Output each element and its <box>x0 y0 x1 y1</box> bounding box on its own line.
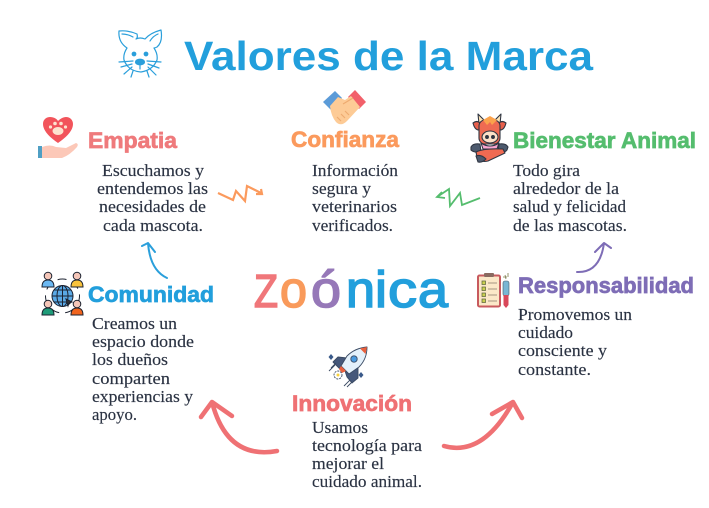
text: Responsabilidad description: constante. <box>518 360 591 379</box>
icon: handshake <box>323 90 366 124</box>
panel: innovacion <box>292 347 422 491</box>
icon: rocket <box>328 347 367 387</box>
text: Innovación description: Usamos <box>312 418 368 437</box>
text: Bienestar Animal description: Todo gira <box>513 161 580 180</box>
text: Comunidad description <box>92 314 194 424</box>
logo: Zoónica: ó <box>311 261 341 318</box>
text: Comunidad description: experiencias y <box>92 387 194 406</box>
text: Comunidad description: Creamos un <box>92 314 178 333</box>
heading: Comunidad: Comunidad <box>88 282 214 307</box>
text: Comunidad description: espacio donde <box>92 332 194 351</box>
icon: clipboard and pen <box>478 273 509 308</box>
logo: Zoónica <box>254 261 449 318</box>
icon: community globe <box>42 272 83 315</box>
arrow: red curved right <box>444 402 522 448</box>
heading: Empatia: Empatia <box>88 128 178 153</box>
heading: Responsabilidad: Responsabilidad <box>518 273 694 298</box>
panel: confianza <box>291 90 400 235</box>
text: Bienestar Animal description: de las mascotas. <box>513 216 627 235</box>
text: Confianza description: Información <box>312 161 399 180</box>
text: Confianza description: segura y <box>312 179 372 198</box>
arrow: green zigzag <box>437 189 480 206</box>
text: Responsabilidad description: cuidado <box>518 323 573 342</box>
text: Innovación description <box>312 418 422 491</box>
icon: sitting bull <box>471 114 508 162</box>
logo: Zoónica: a <box>418 261 449 318</box>
title: Valores de la Marca <box>184 33 594 79</box>
logo: Zoónica: c <box>388 261 417 318</box>
logo: Zoónica: i <box>375 261 387 318</box>
text: Innovación description: tecnología para <box>312 436 422 455</box>
text: Confianza description: verificados. <box>312 216 393 235</box>
text: Comunidad description: los dueños <box>92 350 168 369</box>
text: Confianza description: veterinarios <box>312 197 397 216</box>
panel: bienestar animal <box>471 114 696 235</box>
text: Bienestar Animal description: alrededor de la <box>513 179 619 198</box>
arrow: orange zigzag <box>218 186 262 201</box>
text: Responsabilidad description: consciente y <box>518 341 608 360</box>
text: Confianza description <box>312 161 399 235</box>
logo: Zoónica: Z <box>254 265 278 317</box>
logo: Zoónica: o <box>280 261 307 318</box>
text: Empatia description: cada mascota. <box>103 216 203 235</box>
text: Empatia description: necesidades de <box>99 197 206 216</box>
panel: empatia <box>38 117 208 235</box>
arrow: red curved left <box>201 402 277 452</box>
text: Empatia description: entendemos las <box>97 179 208 198</box>
text: Bienestar Animal description: salud y felicidad <box>513 197 626 216</box>
text: Responsabilidad description <box>518 305 633 379</box>
icon: heart with paw over hand <box>38 117 78 158</box>
text: Comunidad description: comparten <box>92 369 171 388</box>
text: Innovación description: cuidado animal. <box>312 472 422 491</box>
logo: Zoónica: n <box>346 261 375 318</box>
heading: Innovación: Innovación <box>292 391 412 416</box>
text: Responsabilidad description: Promovemos un <box>518 305 633 324</box>
text: Innovación description: mejorar el <box>312 454 384 473</box>
panel: comunidad <box>42 272 214 424</box>
text: Empatia description: Escuchamos y <box>102 161 205 180</box>
text: Bienestar Animal description <box>513 161 627 235</box>
arrow: purple curved <box>577 243 611 272</box>
panel: responsabilidad <box>478 273 694 379</box>
arrow: blue curved <box>142 243 167 278</box>
heading: Confianza: Confianza <box>291 127 400 152</box>
icon: cat outline <box>119 30 162 77</box>
text: Empatia description <box>97 161 208 235</box>
heading: Bienestar Animal: Bienestar Animal <box>513 128 696 153</box>
text: Comunidad description: apoyo. <box>92 405 137 424</box>
